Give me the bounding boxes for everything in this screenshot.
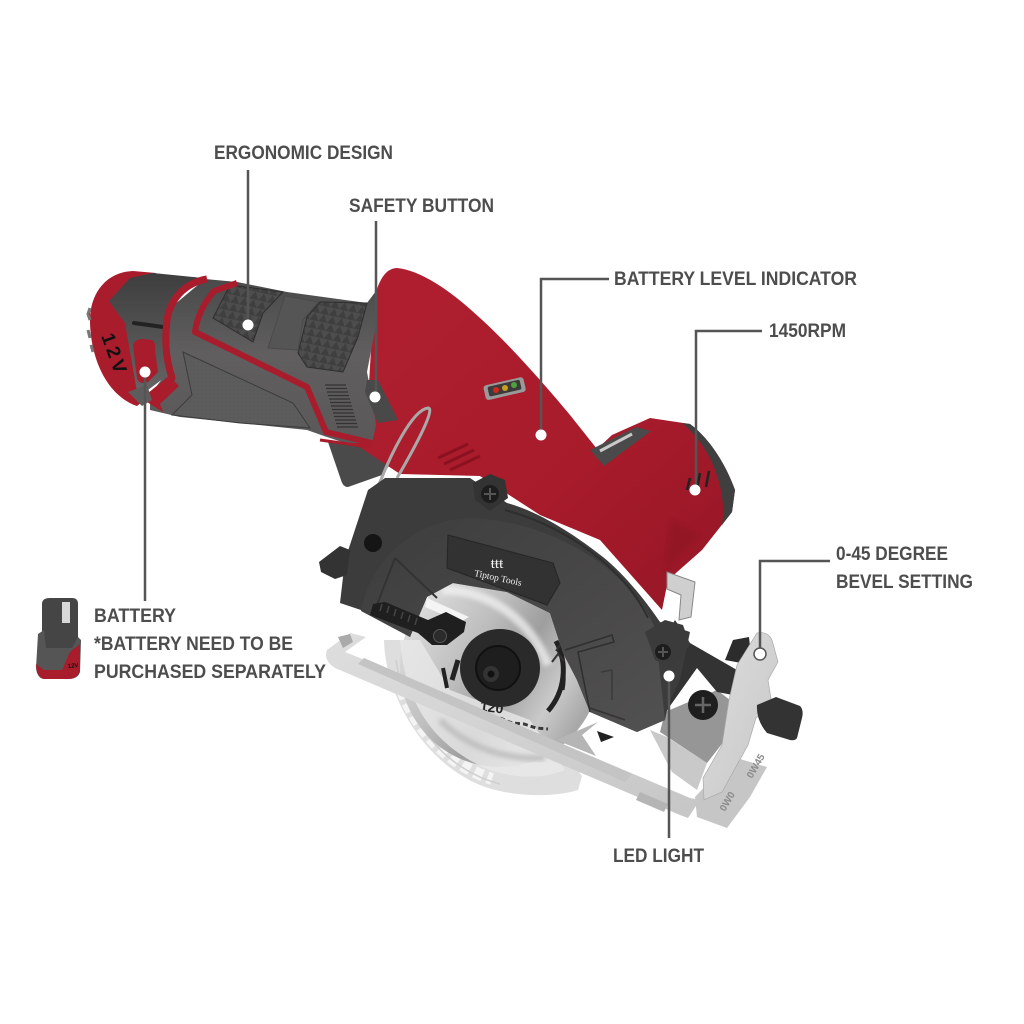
upper rear grip: [298, 302, 367, 372]
logo: ŧŧŧ: [491, 556, 504, 572]
base shoe engraved scale: 0W0: [718, 790, 738, 814]
base shoe rear plate: [695, 757, 767, 828]
base shoe frame: [326, 633, 700, 818]
saw blade: [400, 567, 614, 777]
callout: bevel setting: 0-45 DEGREE: [836, 543, 948, 565]
upper front grip: [213, 285, 283, 342]
bevel lock knob: [757, 697, 803, 740]
callout: safety button: [349, 195, 494, 402]
blade guard: [340, 478, 690, 732]
silver under mount: [660, 690, 730, 763]
base shoe engraved scale: [718, 752, 768, 814]
bevel plate: [703, 633, 778, 800]
motor housing red body: [352, 268, 735, 610]
battery release slot: [134, 323, 163, 327]
transparent lower blade guard: [384, 640, 582, 795]
callout: bevel setting: [754, 543, 973, 660]
motor end dark band: [682, 423, 735, 525]
handle mid panel detail: [268, 296, 318, 350]
handle body: [150, 279, 376, 447]
battery voltage: 12V: [96, 331, 130, 377]
rear bevel knob: [725, 637, 752, 665]
wire hook: [377, 408, 430, 490]
battery pack on handle: [88, 271, 207, 412]
callout: ergonomic design: [214, 142, 393, 330]
callout: LED light: LED LIGHT: [613, 845, 704, 867]
lower grip: [172, 352, 310, 428]
motor label panel: [590, 427, 651, 466]
callout: battery: [94, 366, 326, 683]
translucent guard over blade: [400, 640, 565, 777]
top screw boss: [473, 474, 508, 511]
battery grey clip: [128, 385, 152, 406]
callout: 1450RPM: [690, 320, 846, 496]
blade marking: 120: [479, 698, 505, 717]
blade flange: [460, 629, 540, 707]
base shoe engraved scale: 0W45: [745, 752, 768, 780]
black bevel mount: [640, 620, 737, 722]
callout: battery level indicator: [536, 268, 857, 440]
battery release button: [133, 339, 158, 383]
callout: battery level indicator: BATTERY LEVEL INDICATOR: [614, 268, 857, 290]
silver skid strip: [650, 730, 707, 790]
side hole: [364, 534, 382, 552]
battery level indicator: [483, 377, 526, 401]
callout: battery: PURCHASED SEPARATELY: [94, 661, 326, 683]
vents: [687, 471, 709, 490]
logo: Tiptop Tools: [473, 569, 523, 589]
logo: [473, 556, 523, 589]
icon: battery pack: [36, 598, 81, 679]
grey trigger guard: [328, 440, 392, 487]
callout: battery: BATTERY: [94, 605, 176, 627]
left rear knob: [319, 546, 350, 579]
callout: ergonomic design: ERGONOMIC DESIGN: [214, 142, 393, 164]
front screw boss: [645, 620, 690, 668]
vent ribs: [325, 385, 358, 427]
safety button: [365, 380, 398, 423]
body ribs: [438, 444, 480, 470]
black mount screw: [688, 690, 718, 720]
label plate: [447, 535, 560, 605]
callout: LED light: [613, 670, 704, 867]
icon: battery pack: 12V: [68, 663, 79, 670]
callout: battery: *BATTERY NEED TO BE: [94, 633, 293, 655]
silver bracket: [667, 572, 695, 620]
callout: 1450RPM: 1450RPM: [769, 320, 846, 342]
depth lever: [370, 598, 469, 645]
red inset stripe: [195, 283, 372, 443]
red collar stripe: [150, 279, 207, 396]
product: circular saw: [88, 268, 803, 828]
callout: bevel setting: BEVEL SETTING: [836, 571, 973, 593]
callout: safety button: SAFETY BUTTON: [349, 195, 494, 217]
